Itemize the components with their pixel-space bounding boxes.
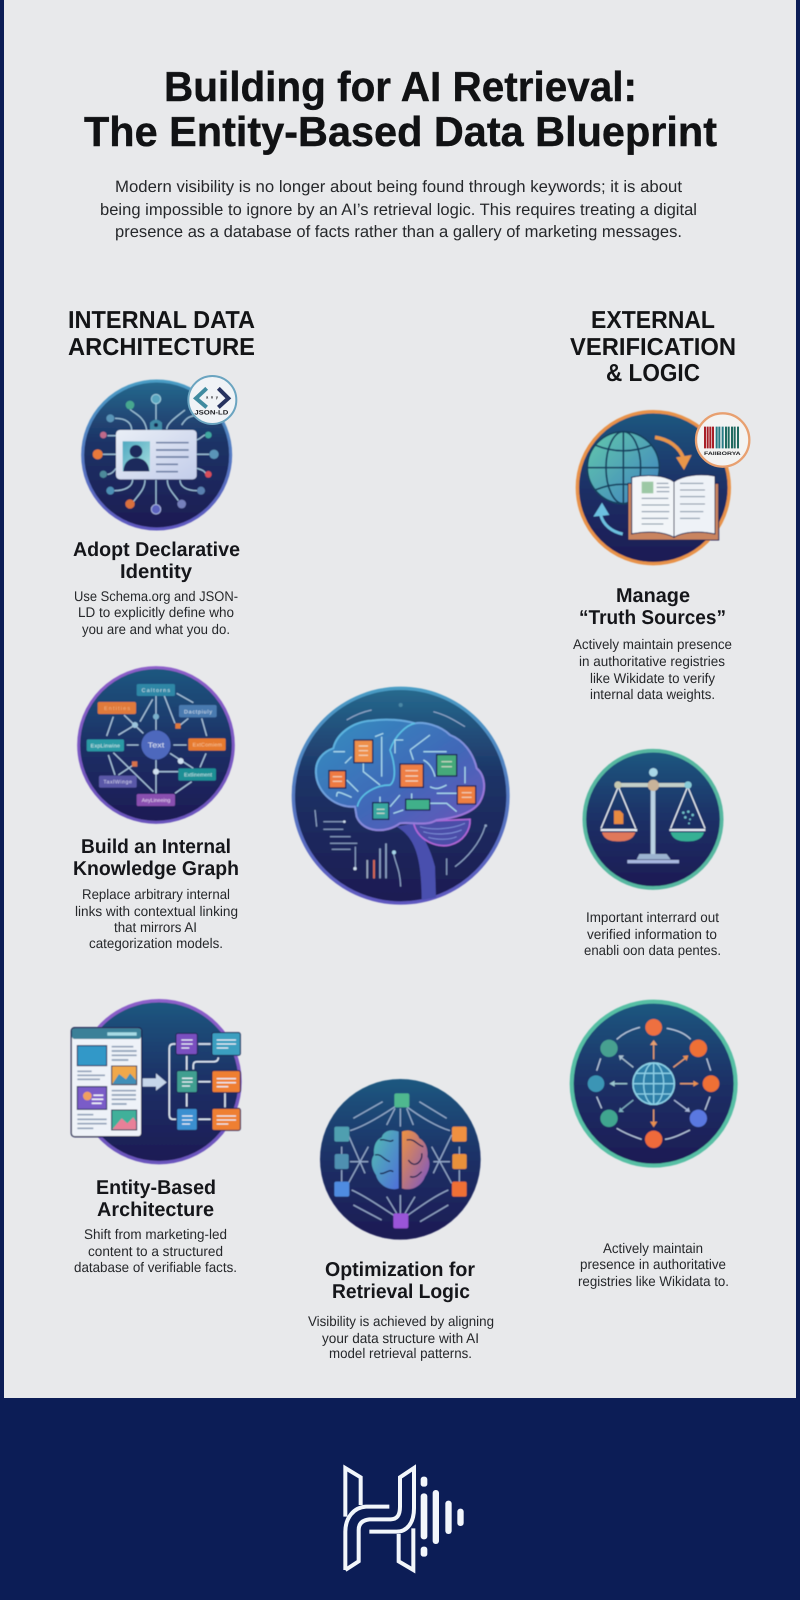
chart marks [315, 710, 485, 887]
text: manage truth sources: internal data weights. [590, 686, 715, 702]
icon: internal knowledge graph: AeyLineeing [142, 798, 170, 803]
text: build an internal knowledge graph [75, 886, 238, 951]
heading: internal data architecture: INTERNAL DATA [68, 307, 255, 334]
text: optimization for retrieval logic: model retrieval patterns. [329, 1345, 472, 1361]
icon: internal knowledge graph: ExpLinwine [91, 743, 120, 749]
heading: manage truth sources [579, 585, 726, 629]
intro paragraph: Modern visibility is no longer about being found through keywords; it is about [115, 178, 682, 196]
text: verified information [584, 909, 721, 958]
heading: manage truth sources: Manage [616, 585, 690, 607]
text: build an internal knowledge graph: categorization models. [89, 935, 223, 951]
text: adopt declarative identity [74, 588, 238, 637]
icon: identity card with circuit nodes [83, 381, 231, 529]
heading: optimization for retrieval logic: Optimization for [325, 1259, 475, 1281]
text: optimization for retrieval logic [308, 1313, 494, 1361]
heading: external verification and logic: VERIFICATION [570, 334, 736, 361]
title: Building for AI Retrieval: [164, 63, 637, 110]
heading: adopt declarative identity: Adopt Declarative [73, 539, 240, 561]
icon: internal knowledge graph [79, 668, 233, 822]
heading: entity-based architecture: Entity-Based [96, 1177, 216, 1199]
icon: AI brain with connected retrieval nodes [320, 1079, 481, 1240]
text: build an internal knowledge graph: that mirrors AI [114, 919, 197, 935]
data blocks on brain [329, 740, 476, 819]
heading: internal data architecture [68, 307, 255, 361]
text: manage truth sources [573, 636, 732, 702]
icon: internal knowledge graph: ExtComiem [193, 742, 222, 748]
text: verified information: Important interrard out [586, 909, 719, 925]
brain hemispheres [316, 720, 484, 830]
text: authoritative registries: presence in authoritative [580, 1256, 726, 1272]
icon: JSON-LD badge: any [206, 395, 218, 399]
intro paragraph: being impossible to ignore by an AI’s retrieval logic. This requires treating a digital [100, 201, 697, 219]
text: adopt declarative identity: LD to explicitly define who [78, 604, 234, 620]
title [84, 63, 717, 155]
heading: adopt declarative identity: Identity [120, 561, 193, 583]
heading: external verification and logic: EXTERNAL [591, 307, 715, 334]
text: manage truth sources: in authoritative registries [579, 653, 725, 669]
heading: optimization for retrieval logic [325, 1259, 475, 1303]
icon: globe and open book [577, 412, 729, 564]
text: optimization for retrieval logic: Visibility is achieved by aligning [308, 1313, 494, 1329]
text: entity-based architecture: database of verifiable facts. [74, 1259, 237, 1275]
panel: external verification and logic [570, 307, 749, 1289]
heading: manage truth sources: “Truth Sources” [579, 607, 726, 629]
icon: internal knowledge graph: Entities [104, 706, 130, 711]
text: manage truth sources: like Wikidate to verify [590, 670, 715, 686]
heading: external verification and logic [570, 307, 736, 387]
text: adopt declarative identity: you are and what you do. [82, 621, 230, 637]
intro paragraph: presence as a database of facts rather than a gallery of marketing messages. [115, 223, 682, 241]
text: verified information: verified information to [587, 926, 717, 942]
text: authoritative registries: registries like Wikidata to. [578, 1273, 729, 1289]
icon: barcode badge: FAIIBORYA [704, 451, 741, 456]
text: adopt declarative identity: Use Schema.org and JSON- [74, 588, 238, 604]
text: optimization for retrieval logic: your data structure with AI [322, 1330, 479, 1346]
panel: internal data architecture [68, 307, 255, 1275]
heading: entity-based architecture: Architecture [97, 1199, 214, 1221]
text: entity-based architecture [74, 1226, 237, 1275]
icon: internal knowledge graph: Caltorns [142, 688, 170, 693]
heading: internal data architecture: ARCHITECTURE [68, 334, 255, 361]
text: authoritative registries [578, 1240, 729, 1289]
heading: entity-based architecture [96, 1177, 216, 1221]
icon: internal knowledge graph: TaxlWinge [103, 779, 132, 785]
heading: optimization for retrieval logic: Retrieval Logic [332, 1281, 470, 1303]
text: manage truth sources: Actively maintain presence [573, 636, 732, 652]
text: entity-based architecture: content to a structured [88, 1243, 223, 1259]
text: build an internal knowledge graph: links with contextual linking [75, 903, 238, 919]
icon: page to structured entity blocks [71, 1001, 240, 1163]
intro paragraph [100, 178, 697, 241]
footer logo: H with sound bars [345, 1468, 464, 1570]
icon: internal knowledge graph: Dactpiuly [184, 709, 212, 715]
brain stem [397, 823, 436, 900]
icon: JSON-LD badge [188, 376, 236, 424]
heading: build an internal knowledge graph [73, 836, 239, 880]
text: verified information: enabli oon data pentes. [584, 942, 721, 958]
heading: build an internal knowledge graph: Build an Internal [81, 836, 231, 858]
icon: internal knowledge graph: Text [148, 741, 164, 749]
cerebellum [413, 819, 470, 846]
icon: barcode badge [696, 413, 749, 467]
icon: balance scale [584, 751, 722, 888]
title: The Entity-Based Data Blueprint [84, 108, 717, 155]
heading: external verification and logic: & LOGIC [606, 360, 700, 387]
central brain illustration [293, 688, 508, 903]
heading: build an internal knowledge graph: Knowledge Graph [73, 858, 239, 880]
icon: internal knowledge graph: Extlinement [184, 772, 212, 778]
heading: adopt declarative identity [73, 539, 240, 583]
text: entity-based architecture: Shift from marketing-led [84, 1226, 227, 1242]
icon: JSON-LD badge: JSON-LD [194, 409, 228, 416]
icon: globe hub network [572, 1002, 736, 1166]
text: authoritative registries: Actively maintain [603, 1240, 703, 1256]
text: build an internal knowledge graph: Replace arbitrary internal [82, 886, 230, 902]
